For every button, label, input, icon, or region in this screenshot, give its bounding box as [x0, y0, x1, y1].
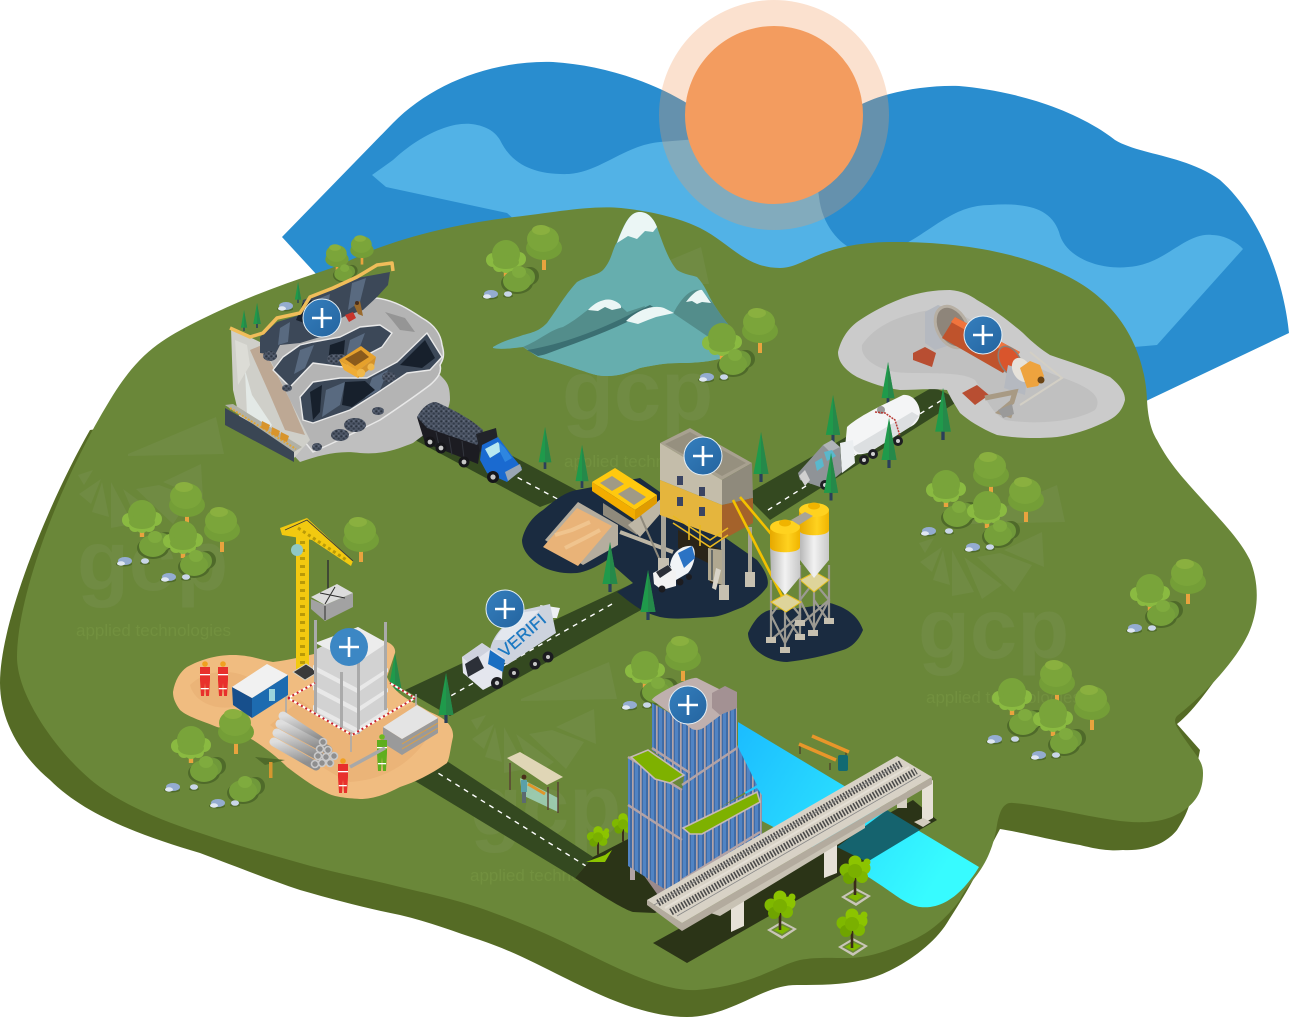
river — [738, 722, 979, 907]
marker: office tower — [669, 686, 707, 724]
land: island top — [17, 207, 1257, 990]
quarry apron — [270, 360, 450, 462]
sky: light blue waves — [372, 124, 1243, 350]
quarry grass and trees — [241, 235, 374, 331]
batch plant asphalt pad — [522, 478, 768, 619]
railway bridge — [647, 756, 933, 932]
quarry rock mass — [260, 298, 443, 452]
plant railing — [673, 516, 728, 547]
office tower — [628, 678, 762, 905]
crane load — [311, 584, 353, 621]
plant legs — [658, 507, 755, 600]
container cabin — [232, 664, 288, 718]
sun with halo — [659, 0, 889, 230]
worker in green — [377, 734, 387, 771]
pines beside plant — [602, 542, 656, 620]
park bench and bin — [799, 736, 849, 771]
tower upper tier — [652, 703, 700, 790]
tower roof — [652, 678, 737, 730]
structure under construction — [313, 620, 388, 735]
mine cart — [339, 346, 376, 378]
watermarks: gcp applied technologies: gcp — [77, 514, 228, 609]
verifi mixer truck — [462, 604, 560, 690]
sky: blue background hills — [282, 62, 1289, 440]
road network — [405, 387, 960, 878]
small trees by tower — [586, 813, 634, 862]
miner with barrow — [345, 301, 363, 322]
construction site sand — [173, 640, 453, 799]
dump truck — [417, 402, 522, 483]
watermarks: gcp applied technologies: applied technologies — [470, 866, 625, 885]
quarry coal heaps — [263, 351, 396, 451]
park trees — [764, 856, 871, 956]
building and bridge shadows — [575, 800, 937, 963]
silos — [766, 502, 834, 653]
yellow feed pipes — [733, 497, 785, 602]
marker: verifi truck — [486, 590, 524, 628]
silo asphalt pad — [748, 603, 863, 662]
watermarks: gcp applied technologies: applied technologies — [76, 621, 231, 640]
crane — [280, 518, 353, 680]
concrete pipes — [274, 716, 338, 768]
mountain — [493, 212, 737, 376]
safety barrier — [286, 683, 416, 752]
conveyor and truss — [603, 498, 673, 565]
mountain snow caps — [588, 212, 711, 324]
watermarks: gcp applied technologies: gcp — [918, 582, 1069, 677]
verifi drum label: VERIFI — [495, 610, 550, 661]
quarry rail — [225, 408, 294, 462]
quarry top edge — [230, 263, 393, 337]
loading bay — [678, 530, 722, 590]
marker: batch plant — [684, 437, 722, 475]
watermarks: gcp applied technologies: gcp — [562, 344, 713, 439]
watermarks: gcp applied technologies — [76, 247, 1081, 885]
batch plant — [543, 428, 785, 602]
pine trees — [388, 362, 951, 698]
watermarks: gcp applied technologies: applied technologies — [564, 452, 719, 471]
silo one — [766, 512, 834, 653]
workers — [200, 661, 387, 793]
tree clusters — [116, 225, 1206, 760]
watermarks: gcp applied technologies: gcp — [470, 759, 621, 854]
pines in front of tanker — [824, 418, 896, 500]
tanker truck — [798, 395, 920, 490]
marker: kiln — [964, 316, 1002, 354]
site trees and rocks — [164, 709, 285, 808]
kiln drum — [925, 301, 1044, 395]
yellow hopper — [592, 468, 657, 520]
bridge piers — [731, 780, 933, 932]
slab stack — [383, 705, 438, 755]
small mixer at plant — [653, 546, 695, 592]
silo two — [799, 502, 829, 635]
watermarks: gcp applied technologies: applied technologies — [926, 688, 1081, 707]
land: island side — [0, 400, 1233, 1017]
quarry cliff facets — [278, 278, 435, 420]
pine near site road — [438, 673, 454, 723]
quarry cliffs — [260, 272, 442, 423]
quarry — [225, 235, 450, 462]
bus stop — [507, 752, 563, 813]
plant tower — [660, 428, 753, 540]
tower lower tier — [682, 788, 762, 905]
tower green terraces — [631, 750, 760, 834]
marker: quarry — [303, 299, 341, 337]
steel pipe carried by workers — [350, 748, 385, 767]
kiln equipment — [913, 347, 1062, 418]
quarry left rock face — [231, 328, 310, 458]
sand bin — [543, 502, 618, 566]
cement kiln site — [838, 290, 1125, 438]
marker: construction site — [330, 628, 368, 666]
